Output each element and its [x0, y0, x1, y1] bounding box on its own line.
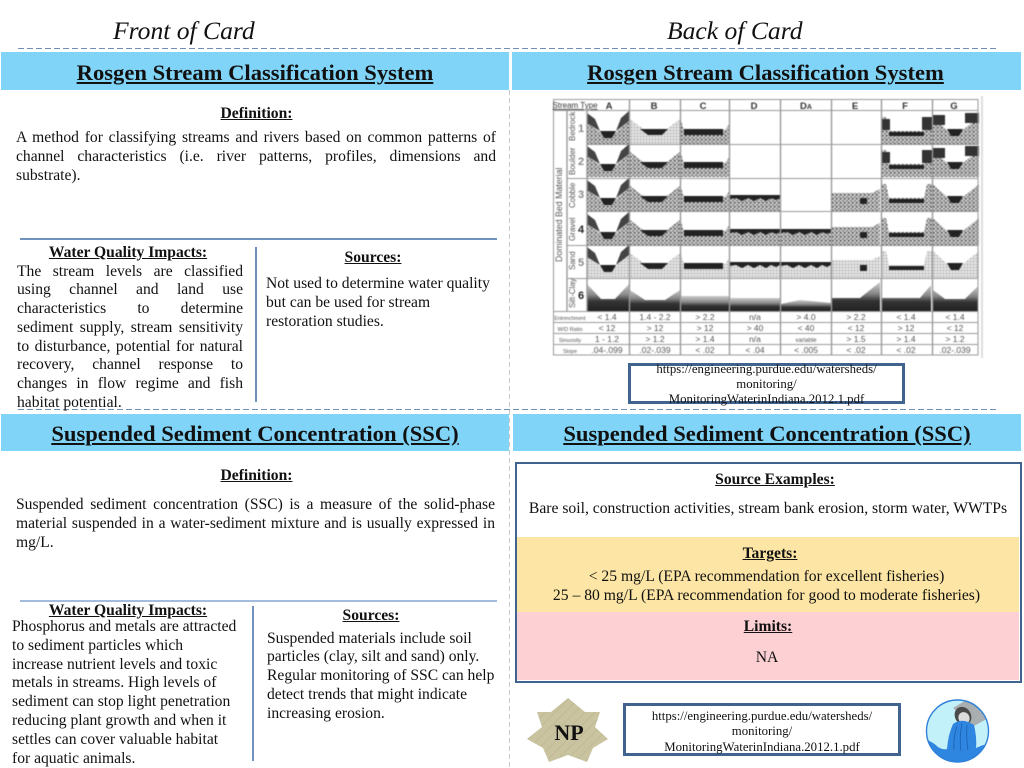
metrics table: < 1.4 [896, 312, 916, 322]
URL box: Rosgen reference [628, 363, 905, 404]
row labels: Sand [568, 251, 577, 270]
heading band: SSC front [1, 414, 509, 451]
metrics table: < 1.4 [597, 312, 617, 322]
SSC water quality impacts text: sediment can stop light penetration [12, 693, 230, 710]
column headers: Stream Type [552, 101, 598, 110]
chart: Rosgen stream type classification table: 5 [578, 257, 584, 269]
metrics table: > 12 [647, 323, 664, 333]
Rosgen definition text: channel characteristics (i.e. river patterns, profiles, dimensions and [16, 148, 496, 165]
SSC definition text: material suspended in a water-sediment mixture and is usually expressed in [16, 515, 495, 532]
row labels: Cobble [568, 182, 577, 208]
SSC sources text: increasing erosion. [267, 705, 385, 722]
divider: Rosgen horizontal [20, 238, 497, 240]
SSC sources text [267, 630, 494, 722]
SSC water quality impacts heading: Water Quality Impacts: [49, 602, 207, 619]
metrics table: 1 - 1.2 [595, 334, 619, 344]
Rosgen water quality impacts text: to disturbance, potential for natural [17, 338, 243, 355]
row 3 [587, 178, 979, 211]
heading band: SSC front: Suspended Sediment Concentration (SSC) [51, 421, 459, 446]
SSC water quality impacts text: increase nutrient levels and toxic [12, 656, 217, 673]
SSC sources text: Regular monitoring of SSC can help [267, 667, 494, 684]
chart: Rosgen stream type classification table: 3 [578, 189, 584, 201]
row labels [554, 111, 577, 308]
targets text [553, 568, 980, 604]
Rosgen sources text: Not used to determine water quality [266, 275, 490, 292]
URL box: Rosgen reference: MonitoringWaterinIndiana.2012.1.pdf [669, 392, 864, 406]
URL box: Rosgen reference: https://engineering.purdue.edu/watersheds/ [656, 362, 877, 376]
icon: NP badge [527, 698, 608, 762]
grid [553, 99, 978, 355]
heading band: SSC back [513, 414, 1021, 451]
URL box: SSC reference: monitoring/ [732, 724, 792, 738]
column headers: DA [800, 101, 812, 112]
metrics table: > 1.4 [695, 334, 715, 344]
Rosgen sources text [266, 275, 490, 330]
metrics table: < 12 [599, 323, 616, 333]
metrics table: .04-.099 [591, 345, 623, 355]
metrics table: < 12 [947, 323, 964, 333]
SSC sources text: particles (clay, silt and sand) only. [267, 648, 479, 665]
metrics table: > 2.2 [846, 312, 866, 322]
Rosgen sources heading: Sources: [345, 249, 401, 266]
SSC definition text: mg/L. [16, 534, 54, 551]
metrics table: Sinuosity [559, 338, 581, 344]
Rosgen water quality impacts heading: Water Quality Impacts: [49, 244, 207, 261]
metrics table: > 1.5 [846, 334, 866, 344]
metrics table: > 1.2 [645, 334, 665, 344]
SSC water quality impacts text: metals in streams. High levels of [12, 674, 216, 691]
targets heading: Targets: [743, 545, 797, 562]
icon: NP badge: NP [554, 720, 584, 745]
metrics table: variable [795, 338, 817, 344]
SSC sources heading: Sources: [343, 607, 399, 624]
row 4 [587, 212, 979, 245]
divider: Rosgen vertical [255, 247, 257, 402]
source examples heading: Source Examples: [715, 471, 835, 488]
SSC sources text: Suspended materials include soil [267, 630, 472, 646]
divider: SSC horizontal [20, 600, 497, 602]
row labels: Silt-Clay [568, 278, 577, 308]
Rosgen water quality impacts text: changes in flow regime and fish [17, 375, 243, 392]
metrics table: .02-.039 [939, 345, 971, 355]
SSC definition text [16, 496, 495, 551]
chart: Rosgen stream type classification table [552, 96, 984, 358]
metrics table: < .04 [745, 345, 765, 355]
column headers [552, 101, 958, 112]
metrics table: > 40 [747, 323, 764, 333]
row labels: Bedrock [568, 111, 577, 141]
chart: Rosgen stream type classification table: 2 [578, 156, 584, 168]
column headers: B [651, 101, 658, 112]
row labels: Boulder [568, 147, 577, 175]
URL box: SSC reference [623, 703, 901, 756]
heading band: Rosgen front [1, 52, 509, 90]
chart: Rosgen stream type classification table: 4 [578, 224, 585, 236]
metrics table: < .02 [695, 345, 715, 355]
Rosgen water quality impacts text: The stream levels are classified [17, 262, 243, 280]
SSC water quality impacts text: settles can cover valuable habitat [12, 731, 218, 748]
SSC water quality impacts text: for aquatic animals. [12, 750, 135, 767]
SSC definition text: Suspended sediment concentration (SSC) is a measure of the solid-phase [16, 496, 495, 513]
Rosgen water quality impacts text [17, 262, 243, 411]
chart: Rosgen stream type classification table: 1 [578, 123, 584, 135]
metrics table: Slope [563, 349, 577, 355]
column headers: D [751, 101, 758, 112]
Rosgen water quality impacts text: characteristics to determine [17, 300, 243, 317]
Rosgen sources text: but can be used for stream [266, 294, 430, 311]
metrics table: < 1.4 [945, 312, 965, 322]
SSC water quality impacts text: to sediment particles which [12, 637, 183, 654]
SSC water quality impacts text [12, 618, 236, 767]
limits background [517, 612, 1019, 680]
icon: pipe discharging water [926, 699, 990, 763]
metrics table: .02-.039 [639, 345, 671, 355]
metrics table: W/D Ratio [557, 327, 583, 333]
divider: SSC vertical [252, 606, 254, 761]
metrics table: < .02 [846, 345, 866, 355]
title: front of card: Front of Card [113, 16, 255, 45]
limits text: NA [756, 649, 778, 666]
column headers: F [902, 101, 908, 112]
SSC definition heading: Definition: [221, 467, 292, 484]
heading band: Rosgen back: Rosgen Stream Classification System [587, 60, 944, 85]
metrics table: Entrenchment [554, 316, 586, 322]
metrics table: n/a [749, 312, 761, 322]
Rosgen water quality impacts text: using channel and land use [17, 281, 243, 298]
metrics table: < .02 [896, 345, 916, 355]
heading band: Rosgen front: Rosgen Stream Classification System [77, 60, 433, 85]
Rosgen definition text: substrate). [16, 167, 81, 184]
metrics table: > 2.2 [695, 312, 715, 322]
heading band: Rosgen back [512, 52, 1021, 90]
URL box: Rosgen reference: monitoring/ [736, 377, 797, 391]
row labels: Dominated Bed Material [554, 168, 564, 262]
SSC sources text: detect trends that might indicate [267, 686, 467, 703]
metrics table: < 40 [798, 323, 815, 333]
Rosgen sources text: restoration studies. [266, 313, 384, 330]
Rosgen water quality impacts text: sediment supply, stream sensitivity [17, 319, 243, 336]
row 1 [587, 111, 979, 144]
chart: Rosgen stream type classification table: 6 [578, 290, 584, 302]
metrics table: < .005 [794, 345, 818, 355]
targets background [517, 537, 1019, 612]
SSC water quality impacts text: reducing plant growth and when it [12, 712, 226, 729]
row 2 [587, 144, 979, 177]
column headers: C [700, 101, 707, 112]
URL box: SSC reference: MonitoringWaterinIndiana.2012.1.pdf [664, 740, 860, 754]
metrics table: > 4.0 [796, 312, 816, 322]
Rosgen water quality impacts text: habitat potential. [17, 394, 122, 411]
heading band: SSC back: Suspended Sediment Concentration (SSC) [563, 421, 971, 446]
row 6 [587, 282, 978, 311]
panel: SSC source examples, targets and limits [515, 462, 1022, 683]
column headers: A [606, 101, 613, 112]
metrics table: > 12 [898, 323, 915, 333]
column headers: E [852, 101, 858, 112]
source examples text: Bare soil, construction activities, stream bank erosion, storm water, WWTPs [529, 500, 1007, 517]
targets text: < 25 mg/L (EPA recommendation for excellent fisheries) [589, 568, 944, 585]
Rosgen definition text [16, 129, 496, 184]
row 5 [587, 245, 979, 278]
targets text: 25 – 80 mg/L (EPA recommendation for good to moderate fisheries) [553, 587, 980, 604]
metrics table: > 1.4 [896, 334, 916, 344]
column headers: G [950, 101, 958, 112]
metrics table: < 12 [848, 323, 865, 333]
metrics table: > 12 [697, 323, 714, 333]
metrics table: 1.4 - 2.2 [639, 312, 671, 322]
limits heading: Limits: [744, 618, 792, 635]
SSC water quality impacts text: Phosphorus and metals are attracted [12, 618, 236, 635]
metrics table: > 1.2 [945, 334, 965, 344]
metrics table [554, 312, 971, 355]
row labels: Gravel [568, 217, 577, 241]
URL box: SSC reference: https://engineering.purdue.edu/watersheds/ [652, 709, 872, 723]
Rosgen definition text: A method for classifying streams and rivers based on common patterns of [16, 129, 496, 146]
Rosgen water quality impacts text: recovery, channel response to [17, 356, 243, 373]
title: back of card: Back of Card [667, 16, 803, 45]
Rosgen definition heading: Definition: [221, 105, 292, 122]
metrics table: n/a [749, 334, 761, 344]
